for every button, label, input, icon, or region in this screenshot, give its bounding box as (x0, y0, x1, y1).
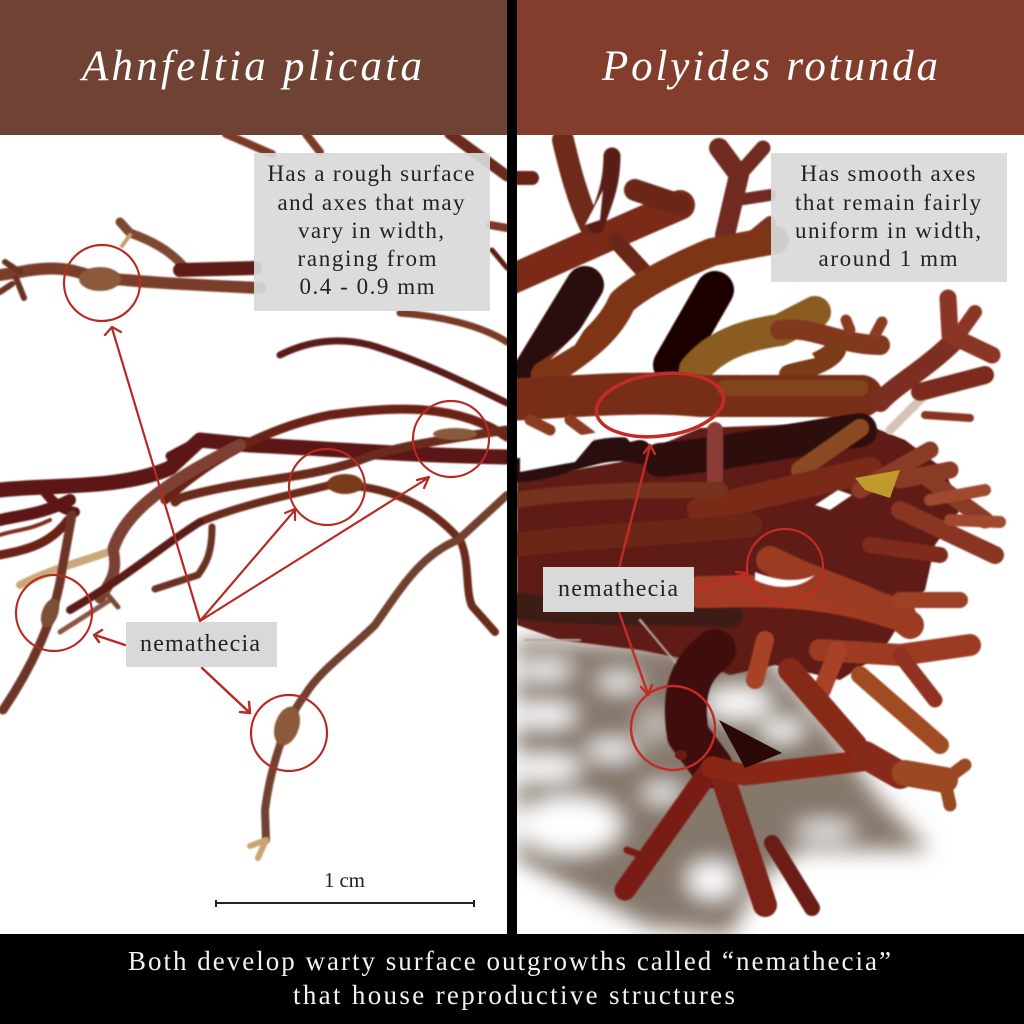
callout: Ahnfeltia description: 0.4 - 0.9 mm (300, 274, 435, 299)
scale bar (216, 868, 474, 907)
shadows (509, 640, 930, 935)
callout: Polyides description: uniform in width, (795, 218, 981, 243)
annotations: left (16, 245, 489, 771)
glossy red lower body (700, 591, 900, 615)
annotations: right (593, 366, 823, 770)
mid branches (660, 430, 860, 460)
panel: Ahnfeltia plicata photo (0, 134, 507, 934)
upper left cluster (510, 205, 680, 280)
divider (507, 0, 517, 934)
callout: Ahnfeltia description: vary in width, (298, 218, 444, 243)
label: nemathecia right: nemathecia (558, 576, 678, 602)
dark rear branches (530, 285, 585, 375)
callout: Ahnfeltia description: and axes that may (278, 190, 465, 215)
callout: Ahnfeltia description: Has a rough surface (268, 161, 474, 186)
label: nemathecia left (126, 622, 277, 667)
header: Ahnfeltia plicata: Ahnfeltia plicata (79, 43, 422, 90)
scale bar: 1 cm (324, 868, 365, 892)
callout: Polyides description (771, 153, 1007, 282)
olive branch (695, 312, 815, 370)
circle markers (16, 245, 489, 771)
footer caption: that house reproductive structures (293, 980, 735, 1010)
arrows (619, 445, 746, 695)
callout: Polyides description: that remain fairly (795, 190, 982, 215)
gaps in thallus (519, 190, 852, 587)
yellow patch (855, 470, 900, 498)
foot (686, 650, 715, 767)
main horizontal band (505, 394, 862, 400)
circle markers (593, 366, 823, 770)
callout: Polyides description: around 1 mm (818, 246, 958, 271)
nemathecia swellings (37, 267, 477, 749)
callout: Ahnfeltia description: ranging from (298, 246, 437, 271)
panel: Polyides rotunda photo (505, 135, 1024, 935)
main thallus mass (517, 422, 960, 680)
header: Polyides rotunda: Polyides rotunda (601, 43, 938, 90)
header: Ahnfeltia plicata (0, 0, 507, 135)
right forks (880, 340, 955, 402)
dark triangle (719, 720, 782, 768)
small bead (675, 750, 687, 760)
right tips (860, 450, 985, 520)
label: nemathecia right (543, 567, 694, 612)
header: Polyides rotunda (517, 0, 1024, 135)
callout: Polyides description: Has smooth axes (800, 161, 976, 186)
forked top (719, 148, 739, 235)
footer caption (0, 934, 1024, 1024)
footer caption: Both develop warty surface outgrowths called “nemathecia” (128, 946, 891, 976)
arrows (94, 327, 429, 713)
diagonal branches (545, 240, 775, 375)
label: nemathecia left: nemathecia (140, 631, 260, 657)
callout: Ahnfeltia description (254, 153, 490, 311)
